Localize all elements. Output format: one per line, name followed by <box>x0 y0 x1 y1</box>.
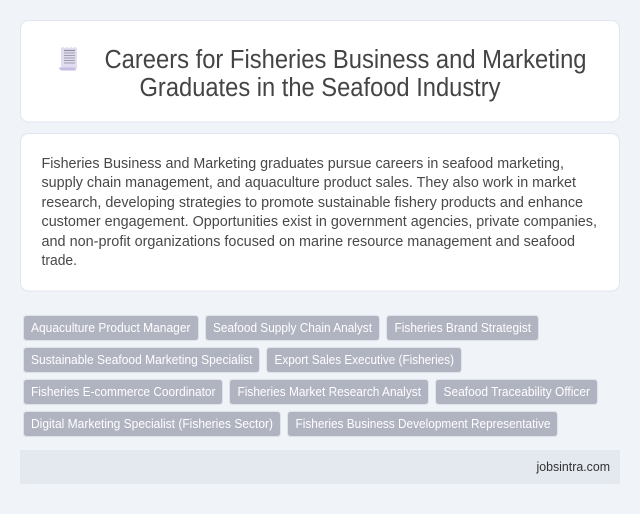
tag: Digital Marketing Specialist (Fisheries Sector) <box>31 416 273 431</box>
panel: title card <box>20 20 620 122</box>
career tags <box>24 316 598 436</box>
panel: description card <box>20 134 620 291</box>
tag <box>24 348 260 372</box>
title: Careers for Fisheries Business and Marketing <box>104 46 586 74</box>
description text: trade. <box>42 253 77 269</box>
tag <box>436 380 598 404</box>
tag <box>288 412 558 436</box>
description text <box>42 156 597 269</box>
tag <box>24 412 280 436</box>
footer bar <box>20 450 620 484</box>
title: Graduates in the Seafood Industry <box>140 74 501 102</box>
tag <box>206 316 380 340</box>
tag <box>24 316 198 340</box>
description text: and non-profit organizations focused on marine resource management and seafood <box>42 234 575 250</box>
tag: Fisheries Business Development Representative <box>296 416 550 431</box>
tag <box>24 380 222 404</box>
tag <box>230 380 428 404</box>
tag <box>386 316 538 340</box>
tag: Aquaculture Product Manager <box>31 320 191 335</box>
tag: Sustainable Seafood Marketing Specialist <box>31 352 253 367</box>
tag: Seafood Traceability Officer <box>444 384 591 399</box>
title <box>104 46 586 102</box>
description text: customer engagement. Opportunities exist in government agencies, private companies, <box>42 214 597 230</box>
icon: document scroll <box>59 47 77 70</box>
tag: Seafood Supply Chain Analyst <box>213 320 372 335</box>
description text: Fisheries Business and Marketing graduates pursue careers in seafood marketing, <box>42 156 564 172</box>
description text: research, developing strategies to promote sustainable fishery products and enhance <box>42 195 583 211</box>
description text: supply chain management, and aquaculture product sales. They also work in market <box>42 175 576 191</box>
tag: Fisheries Brand Strategist <box>394 320 531 335</box>
footer bar: jobsintra.com <box>536 459 610 474</box>
tag: Fisheries Market Research Analyst <box>238 384 421 399</box>
tag: Fisheries E-commerce Coordinator <box>31 384 216 399</box>
tag <box>266 348 462 372</box>
tag: Export Sales Executive (Fisheries) <box>274 352 454 367</box>
